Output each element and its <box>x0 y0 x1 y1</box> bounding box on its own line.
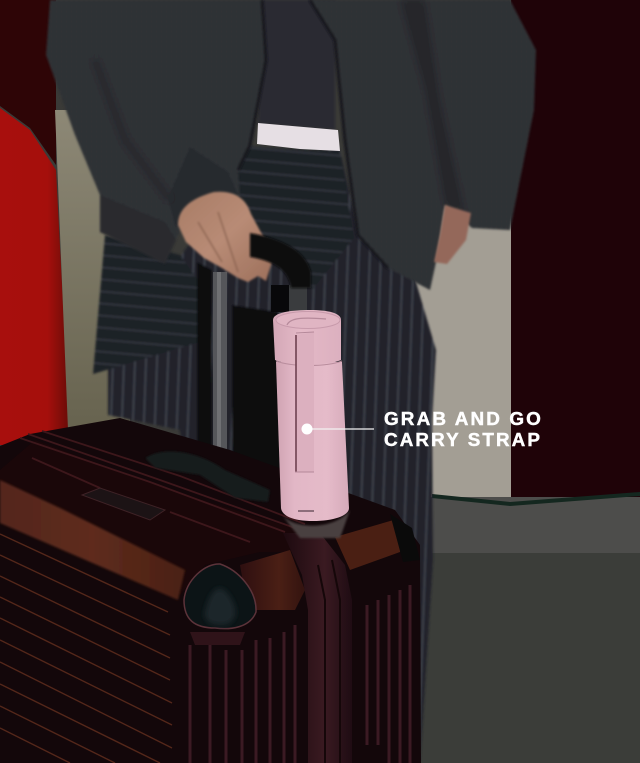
bottle: lid <box>273 310 341 364</box>
person: white shirt band <box>257 123 340 151</box>
callout text: grab and go carry strap <box>384 409 543 450</box>
trousers: shadow beside pole <box>197 262 212 460</box>
suitcase: seam wrap <box>283 533 352 763</box>
person: right hand in pocket <box>434 205 471 264</box>
bottle: lid seam <box>276 361 342 366</box>
person: trousers <box>93 146 436 763</box>
callout text: grab and go carry strap: GRAB AND GO <box>384 409 543 429</box>
jacket: placket edge <box>238 0 266 170</box>
suitcase: top face <box>0 440 320 595</box>
background: left beige wall <box>55 110 130 430</box>
suitcase: lock plate <box>82 488 165 520</box>
background: dark red panel top-left <box>0 0 56 165</box>
background: red panel <box>0 108 68 445</box>
suitcase: corner cap <box>184 564 256 629</box>
person: dark top <box>258 0 335 130</box>
background: green skirting line <box>432 492 640 506</box>
luggage handle grip <box>250 233 311 288</box>
bottle: brand mark <box>298 510 314 512</box>
person: gripping hand <box>178 192 272 282</box>
luggage pull handle: pole <box>213 272 307 462</box>
jacket: right arm fold shadow <box>400 0 465 215</box>
bottle: carry strap <box>295 332 314 472</box>
background: dark maroon panel <box>511 0 640 500</box>
background: floor step <box>430 497 640 555</box>
luggage top handle <box>145 451 270 502</box>
suitcase: corner band right of cap <box>240 550 305 610</box>
trousers: waist panel with horizontal stripes <box>215 146 354 290</box>
bottle: lower body <box>276 362 349 521</box>
bottle <box>273 310 350 538</box>
bottle: contact shadow <box>282 510 350 538</box>
callout text: grab and go carry strap: CARRY STRAP <box>384 430 542 450</box>
person: jacket <box>46 0 536 290</box>
background: lower floor <box>420 553 640 763</box>
suitcase <box>0 418 421 763</box>
background: right beige wall <box>415 200 513 501</box>
suitcase: far corner cap <box>390 514 420 562</box>
bottle: lid top opening <box>276 312 340 328</box>
jacket: left sleeve and front <box>46 0 265 264</box>
jacket: hem shadow <box>100 195 176 264</box>
callout: leader line and dot <box>302 424 374 434</box>
trousers: shadow behind bottle <box>232 305 282 480</box>
suitcase: ridges along top <box>20 431 305 542</box>
jacket: sleeve crease <box>95 60 170 200</box>
suitcase: front horizontal ribs <box>0 534 172 763</box>
trousers: hip flap <box>93 235 212 374</box>
suitcase: front amber band <box>0 480 185 600</box>
jacket: sleeve cuff <box>168 147 238 228</box>
jacket: right front panel <box>310 0 536 290</box>
hand: finger creases <box>198 212 238 272</box>
suitcase: far band <box>335 519 403 570</box>
suitcase: side vertical ribs <box>190 585 410 763</box>
suitcase: top shell <box>0 418 421 763</box>
